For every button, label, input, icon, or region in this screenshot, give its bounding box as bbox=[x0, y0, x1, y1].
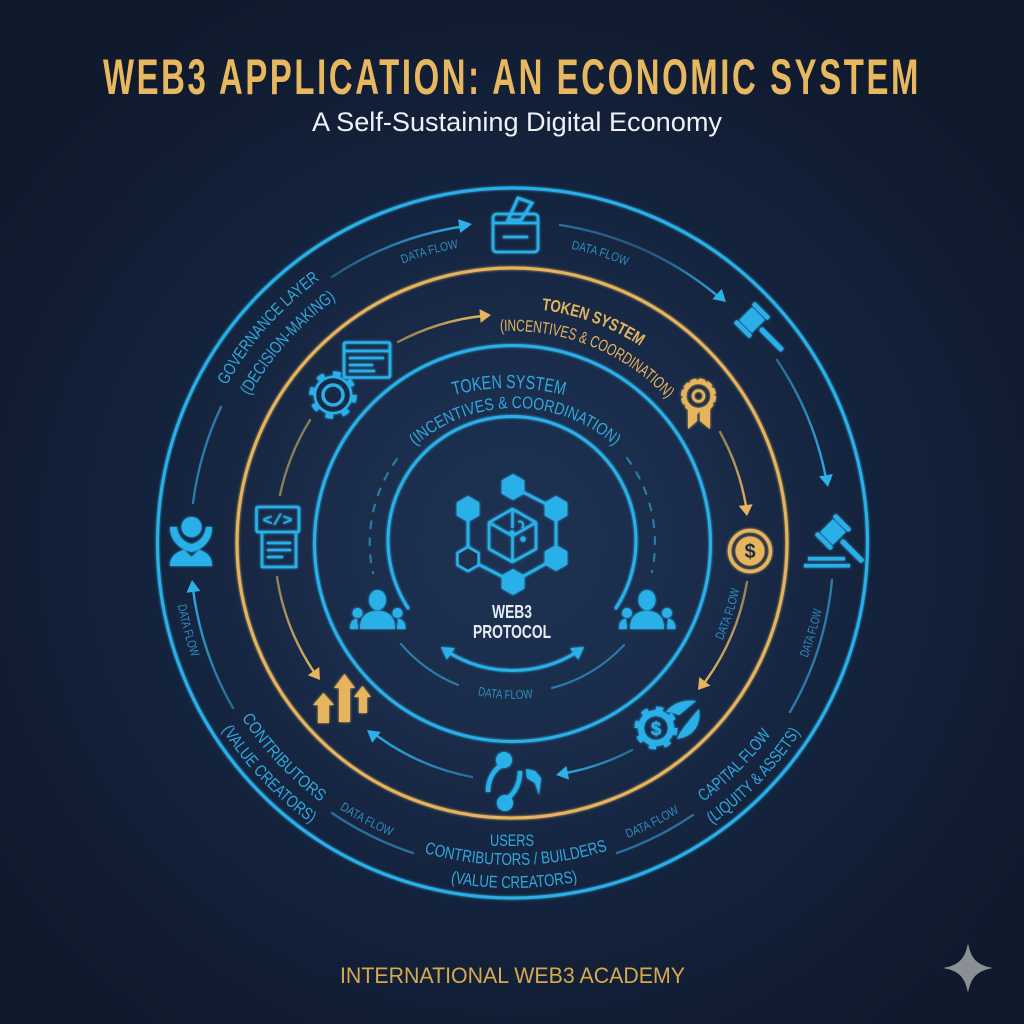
subtitle: A Self-Sustaining Digital Economy bbox=[312, 107, 722, 137]
line: inner lower left bbox=[401, 644, 458, 685]
footer: academy name: INTERNATIONAL WEB3 ACADEMY bbox=[340, 963, 685, 988]
label: liquidity and assets: (LIQUITY & ASSETS) bbox=[707, 728, 802, 826]
line: inner lower right bbox=[552, 645, 624, 688]
network links bbox=[468, 487, 556, 582]
arrow: users to up arrows bbox=[363, 724, 472, 777]
label: contributors: CONTRIBUTORS bbox=[244, 714, 326, 800]
data flow: right: DATA FLOW bbox=[800, 608, 822, 658]
ring: outer governance and capital layer bbox=[158, 188, 868, 898]
label: blue token system: TOKEN SYSTEM bbox=[450, 374, 566, 395]
icon: gold growth arrows bbox=[313, 674, 371, 723]
line: bottom left flow bbox=[332, 813, 413, 853]
icon: code document: </> bbox=[262, 512, 292, 530]
label: value creators left: (VALUE CREATORS) bbox=[220, 726, 316, 824]
label: governance layer: GOVERNANCE LAYER bbox=[218, 272, 320, 383]
label: users: USERS bbox=[490, 831, 534, 850]
data flow: gold track: DATA FLOW bbox=[715, 588, 739, 640]
label: contributors and builders: CONTRIBUTORS / BUILDERS bbox=[426, 840, 606, 866]
icon: user group right bbox=[619, 590, 676, 629]
icon: web3 protocol network bbox=[457, 474, 567, 595]
label: capital flow: CAPITAL FLOW bbox=[698, 727, 770, 800]
line: gear to document bbox=[280, 420, 310, 495]
gear bbox=[312, 374, 354, 416]
data flow: center: DATA FLOW bbox=[478, 686, 532, 699]
line: left upper flow bbox=[193, 407, 221, 503]
outlined hexagon bbox=[458, 547, 478, 571]
ring: protocol core arc bbox=[388, 416, 636, 608]
curved labels bbox=[218, 272, 802, 888]
cube bbox=[489, 509, 536, 562]
arrow: window to token bbox=[398, 308, 492, 342]
data flow: lower left: DATA FLOW bbox=[340, 802, 394, 836]
arrow: contributors to person bbox=[185, 579, 233, 708]
ring: gold token layer bbox=[237, 268, 787, 818]
icon: gavel upper bbox=[734, 302, 793, 361]
flow arrows: inner track bbox=[370, 458, 655, 688]
label: gold incentives and coordination: (INCENTIVES & COORDINATION) bbox=[500, 319, 674, 399]
ring: inner blue token layer bbox=[314, 346, 710, 742]
icon: dollar gear and rocket: $ bbox=[651, 719, 662, 740]
icon: gear with window bbox=[312, 342, 390, 416]
arrow: governance to ballot bbox=[332, 217, 473, 277]
data flow: top left: DATA FLOW bbox=[400, 239, 457, 264]
arrow: coin to rocket bbox=[692, 582, 747, 694]
filled hexagons bbox=[457, 474, 567, 595]
double arrow under protocol bbox=[437, 641, 588, 670]
data flow: left: DATA FLOW bbox=[178, 604, 200, 656]
data flow: top right: DATA FLOW bbox=[572, 240, 630, 265]
icon: code document bbox=[256, 507, 299, 567]
line: right lower flow bbox=[790, 580, 832, 712]
icon: sparkle bbox=[943, 943, 993, 993]
label: decision-making: (DECISION-MAKING) bbox=[240, 290, 336, 395]
arrow: rocket to users bbox=[555, 750, 632, 782]
icon: gold dollar coin bbox=[730, 530, 770, 572]
concentric rings bbox=[158, 188, 868, 898]
data flow: lower right: DATA FLOW bbox=[625, 805, 678, 838]
label: blue incentives and coordination: (INCENTIVES & COORDINATION) bbox=[410, 396, 620, 446]
icon: gavel lower bbox=[804, 514, 873, 572]
center label: web3 protocol: PROTOCOL bbox=[473, 622, 551, 642]
icon: gold rosette badge bbox=[682, 380, 714, 429]
icon: person with raised arms bbox=[170, 517, 212, 566]
arrow: ballot to gavel bbox=[560, 225, 731, 307]
dashed arc right bbox=[627, 458, 655, 572]
window bbox=[344, 342, 390, 378]
flow arrows: middle track bbox=[277, 308, 754, 782]
line: bottom right flow bbox=[617, 815, 693, 853]
icon: gold dollar coin: $ bbox=[744, 541, 756, 563]
data flow labels bbox=[178, 239, 822, 838]
flow arrows: outer track bbox=[185, 217, 835, 853]
center label: web3 protocol: WEB3 bbox=[492, 602, 532, 622]
center label: web3 protocol bbox=[473, 602, 551, 642]
icon: users sync bbox=[488, 752, 541, 811]
dashed arc left bbox=[370, 459, 397, 573]
label: value creators bottom: (VALUE CREATORS) bbox=[452, 870, 576, 888]
icon: ballot box bbox=[493, 198, 538, 252]
icon: user group left bbox=[350, 590, 406, 629]
icon: dollar gear and rocket bbox=[636, 701, 699, 748]
label: gold token system: TOKEN SYSTEM bbox=[543, 298, 646, 346]
arrow: badge to coin bbox=[720, 432, 754, 517]
arrow: gavel to gavel bbox=[777, 360, 835, 488]
arrow: document to up arrows bbox=[277, 577, 326, 684]
